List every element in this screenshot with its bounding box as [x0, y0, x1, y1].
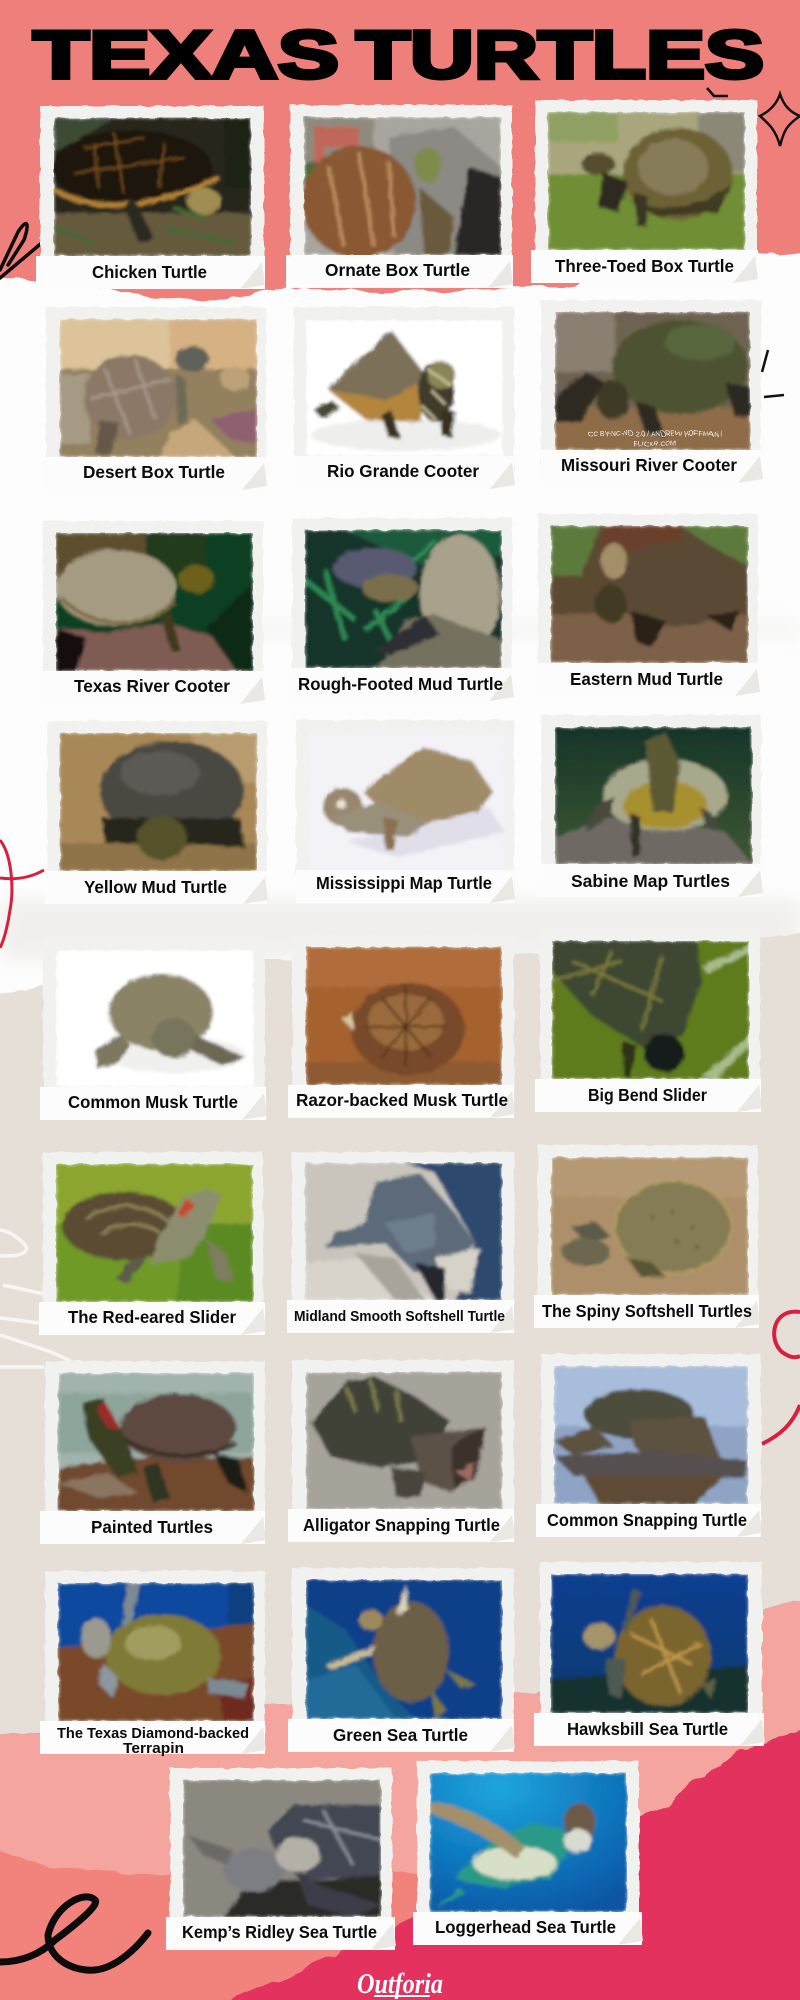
label: Yellow Mud Turtle: Yellow Mud Turtle: [84, 877, 227, 897]
photo: Mississippi Map Turtle: [308, 732, 505, 870]
label: Painted Turtles: Painted Turtles: [91, 1517, 213, 1537]
photo: Chicken Turtle: [52, 118, 251, 256]
photo: Common Musk Turtle: [56, 950, 254, 1087]
photo: Missouri River Cooter: FLICKR.COM: [633, 441, 677, 448]
label: Three-Toed Box Turtle: Three-Toed Box Turtle: [555, 256, 734, 276]
photo: The Red-eared Slider: [56, 1164, 253, 1302]
card: Desert Box Turtle: [44, 307, 267, 490]
card: Kemp's Ridley Sea Turtle: [166, 1768, 396, 1950]
label: The Texas Diamond-backed Terrapin: The Texas Diamond-backed: [57, 1725, 249, 1742]
label: Desert Box Turtle: Desert Box Turtle: [83, 462, 225, 482]
label: Alligator Snapping Turtle: Alligator Snapping Turtle: [303, 1515, 500, 1535]
label: Razor-backed Musk Turtle: Razor-backed Musk Turtle: [296, 1090, 508, 1110]
photo: The Texas Diamond-backed Terrapin: [58, 1583, 254, 1721]
label: Texas River Cooter: Texas River Cooter: [74, 676, 230, 696]
card: Loggerhead Sea Turtle: [413, 1761, 643, 1945]
card: Rio Grande Cooter: [289, 307, 515, 489]
photo: Common Snapping Turtle: [554, 1366, 748, 1504]
card: Chicken Turtle: [36, 106, 265, 289]
decorative doodle: red scribble right: [762, 1312, 800, 1444]
card: Big Bend Slider: [535, 930, 762, 1112]
photo: Hawksbill Sea Turtle: [551, 1574, 748, 1713]
decorative doodle: black curl bottom left: [0, 1897, 148, 1970]
photo: Painted Turtles: [58, 1373, 254, 1511]
photo: Yellow Mud Turtle: [60, 733, 257, 871]
photo: Rough-Footed Mud Turtle: [305, 530, 502, 668]
decorative doodle: black strokes left: [0, 224, 50, 278]
card: Painted Turtles: [40, 1361, 266, 1544]
title: [33, 17, 764, 93]
card: Razor-backed Musk Turtle: [288, 935, 515, 1118]
label: Midland Smooth Softshell Turtle: Midland Smooth Softshell Turtle: [294, 1308, 505, 1325]
label: The Texas Diamond-backed Terrapin: [57, 1725, 249, 1757]
label: The Spiny Softshell Turtles: The Spiny Softshell Turtles: [542, 1301, 752, 1321]
label: The Texas Diamond-backed Terrapin: Terrapin: [123, 1740, 184, 1757]
decorative doodle: white scribble left: [0, 1230, 72, 1367]
photo: Big Bend Slider: [552, 941, 749, 1079]
photo: Missouri River Cooter: [555, 312, 750, 450]
label: Loggerhead Sea Turtle: Loggerhead Sea Turtle: [435, 1917, 616, 1937]
card: Common Musk Turtle: [40, 938, 267, 1120]
label: Green Sea Turtle: Green Sea Turtle: [333, 1725, 468, 1745]
photo: Kemp's Ridley Sea Turtle: [183, 1780, 381, 1917]
card: Green Sea Turtle: [288, 1568, 515, 1752]
photo: Missouri River Cooter: CC BY-NC-ND 2.0 / ANDREW HOFFMAN /: [588, 431, 722, 438]
card: Alligator Snapping Turtle: [288, 1360, 515, 1542]
card: Midland Smooth Softshell Turtle: [287, 1152, 515, 1333]
label: Big Bend Slider: Big Bend Slider: [588, 1085, 707, 1105]
label: Common Snapping Turtle: Common Snapping Turtle: [547, 1510, 747, 1530]
decorative doodle: star outline: [707, 88, 800, 146]
card: Texas River Cooter: [40, 521, 265, 704]
card: The Spiny Softshell Turtles: [534, 1145, 760, 1328]
card: The Red-eared Slider: [39, 1152, 266, 1335]
photo: The Spiny Softshell Turtles: [551, 1157, 748, 1295]
logo: Outforia: Outforia: [357, 1969, 443, 2000]
title: TURTLES: [356, 17, 764, 93]
photo: Loggerhead Sea Turtle: [430, 1773, 627, 1912]
photo: Desert Box Turtle: [60, 319, 257, 457]
card: Sabine Map Turtles: [537, 715, 763, 897]
title: TEXAS: [33, 17, 339, 93]
label: Common Musk Turtle: Common Musk Turtle: [68, 1092, 238, 1112]
card: Common Snapping Turtle: [536, 1354, 762, 1537]
photo: Green Sea Turtle: [306, 1580, 502, 1719]
label: Mississippi Map Turtle: Mississippi Map Turtle: [316, 873, 492, 893]
card: Eastern Mud Turtle: [536, 514, 760, 696]
photo: Sabine Map Turtles: [555, 727, 752, 864]
photo: Alligator Snapping Turtle: [306, 1372, 502, 1509]
photo: Three-Toed Box Turtle: [548, 112, 745, 250]
photo: Midland Smooth Softshell Turtle: [305, 1163, 502, 1300]
label: Eastern Mud Turtle: Eastern Mud Turtle: [570, 669, 723, 689]
decorative doodle: red scribble left: [0, 840, 44, 948]
card: Rough-Footed Mud Turtle: [287, 518, 514, 701]
card: Missouri River Cooter: [541, 300, 763, 483]
label: Rough-Footed Mud Turtle: Rough-Footed Mud Turtle: [298, 674, 503, 694]
photo: Razor-backed Musk Turtle: [306, 947, 502, 1085]
label: Hawksbill Sea Turtle: Hawksbill Sea Turtle: [567, 1719, 728, 1739]
card: Hawksbill Sea Turtle: [534, 1562, 765, 1746]
card: Yellow Mud Turtle: [45, 721, 268, 904]
card: Mississippi Map Turtle: [296, 720, 515, 903]
label: Kemp's Ridley Sea Turtle: Kemp’s Ridley Sea Turtle: [182, 1922, 377, 1942]
label: Chicken Turtle: Chicken Turtle: [92, 262, 207, 282]
label: Sabine Map Turtles: Sabine Map Turtles: [571, 871, 730, 891]
photo: Ornate Box Turtle: [302, 117, 501, 258]
label: The Red-eared Slider: The Red-eared Slider: [68, 1307, 236, 1327]
card: Three-Toed Box Turtle: [531, 100, 758, 283]
photo: Eastern Mud Turtle: [551, 526, 748, 663]
card: The Texas Diamond-backed Terrapin: [40, 1571, 266, 1757]
photo: Texas River Cooter: [56, 533, 253, 671]
photo: Rio Grande Cooter: [306, 320, 503, 456]
label: Ornate Box Turtle: Ornate Box Turtle: [325, 260, 470, 280]
card: Ornate Box Turtle: [286, 105, 513, 288]
label: Missouri River Cooter: Missouri River Cooter: [561, 455, 737, 475]
label: Rio Grande Cooter: Rio Grande Cooter: [327, 461, 479, 481]
decorative doodle: black dashes right: [762, 350, 784, 397]
